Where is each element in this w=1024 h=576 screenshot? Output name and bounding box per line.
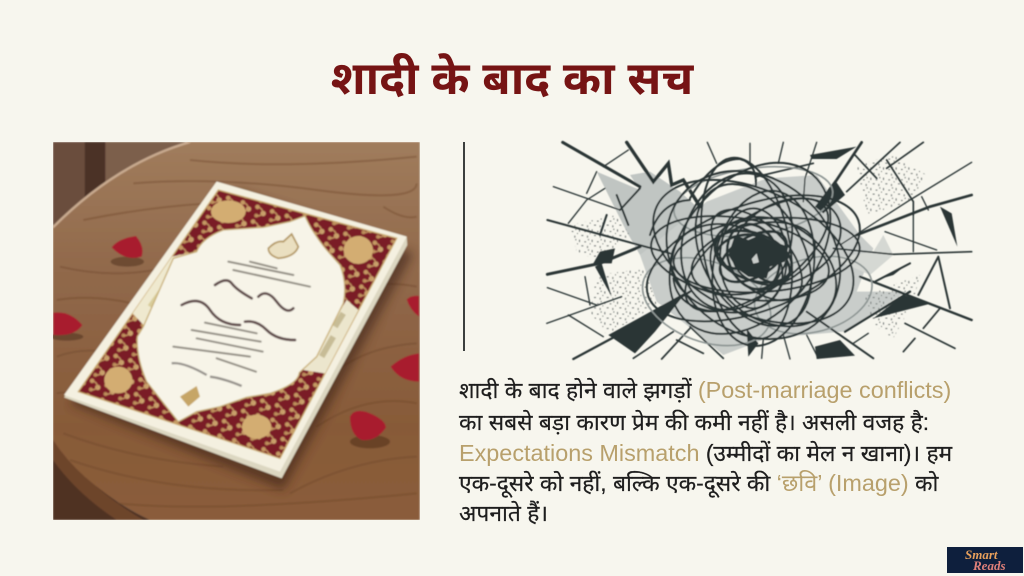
faint grey loops [630,158,881,362]
vertical divider [463,142,465,351]
photo: wedding invitation on a wooden table [53,142,420,520]
body paragraph: एक-दूसरे को नहीं, बल्कि एक-दूसरे की ‘छवि’ (Image) को [459,470,938,496]
wood grain [57,157,417,507]
grey shards [597,172,907,355]
logo: Smart Reads [947,547,1023,573]
logo: Smart Reads: Reads [972,558,1006,573]
invitation card [64,182,407,478]
body paragraph [458,377,953,526]
body paragraph: अपनाते हैं। [459,500,548,526]
cream arch centre [137,216,345,422]
maroon floral border [78,190,397,458]
body paragraph: शादी के बाद होने वाले झगड़ों (Post-marriage conflicts) [459,377,951,403]
crack lines [547,142,972,359]
title: शादी के बाद का सच [331,52,693,104]
logo: Smart Reads: Smart [965,547,998,562]
body paragraph: का सबसे बड़ा कारण प्रेम की कमी नहीं है। असली वजह है: [459,409,929,435]
gold flowers [104,200,373,439]
invitation text [173,262,310,372]
body paragraph: Expectations Mismatch (उम्मीदों का मेल न खाना)। हम [459,440,952,466]
crest icon [268,234,298,258]
cream side panels [133,252,197,328]
bottom ornament [180,386,200,407]
speckle patches [570,155,927,338]
photo background wall [53,142,420,520]
dark shard fragments [593,147,957,359]
dense black knot [708,217,799,297]
table side [53,433,150,520]
illustration: tangled scribble and shattered glass [545,140,974,361]
table top [53,142,420,520]
dark scribble loops [630,131,877,374]
rose petals [50,236,419,448]
card shadow [70,190,413,490]
